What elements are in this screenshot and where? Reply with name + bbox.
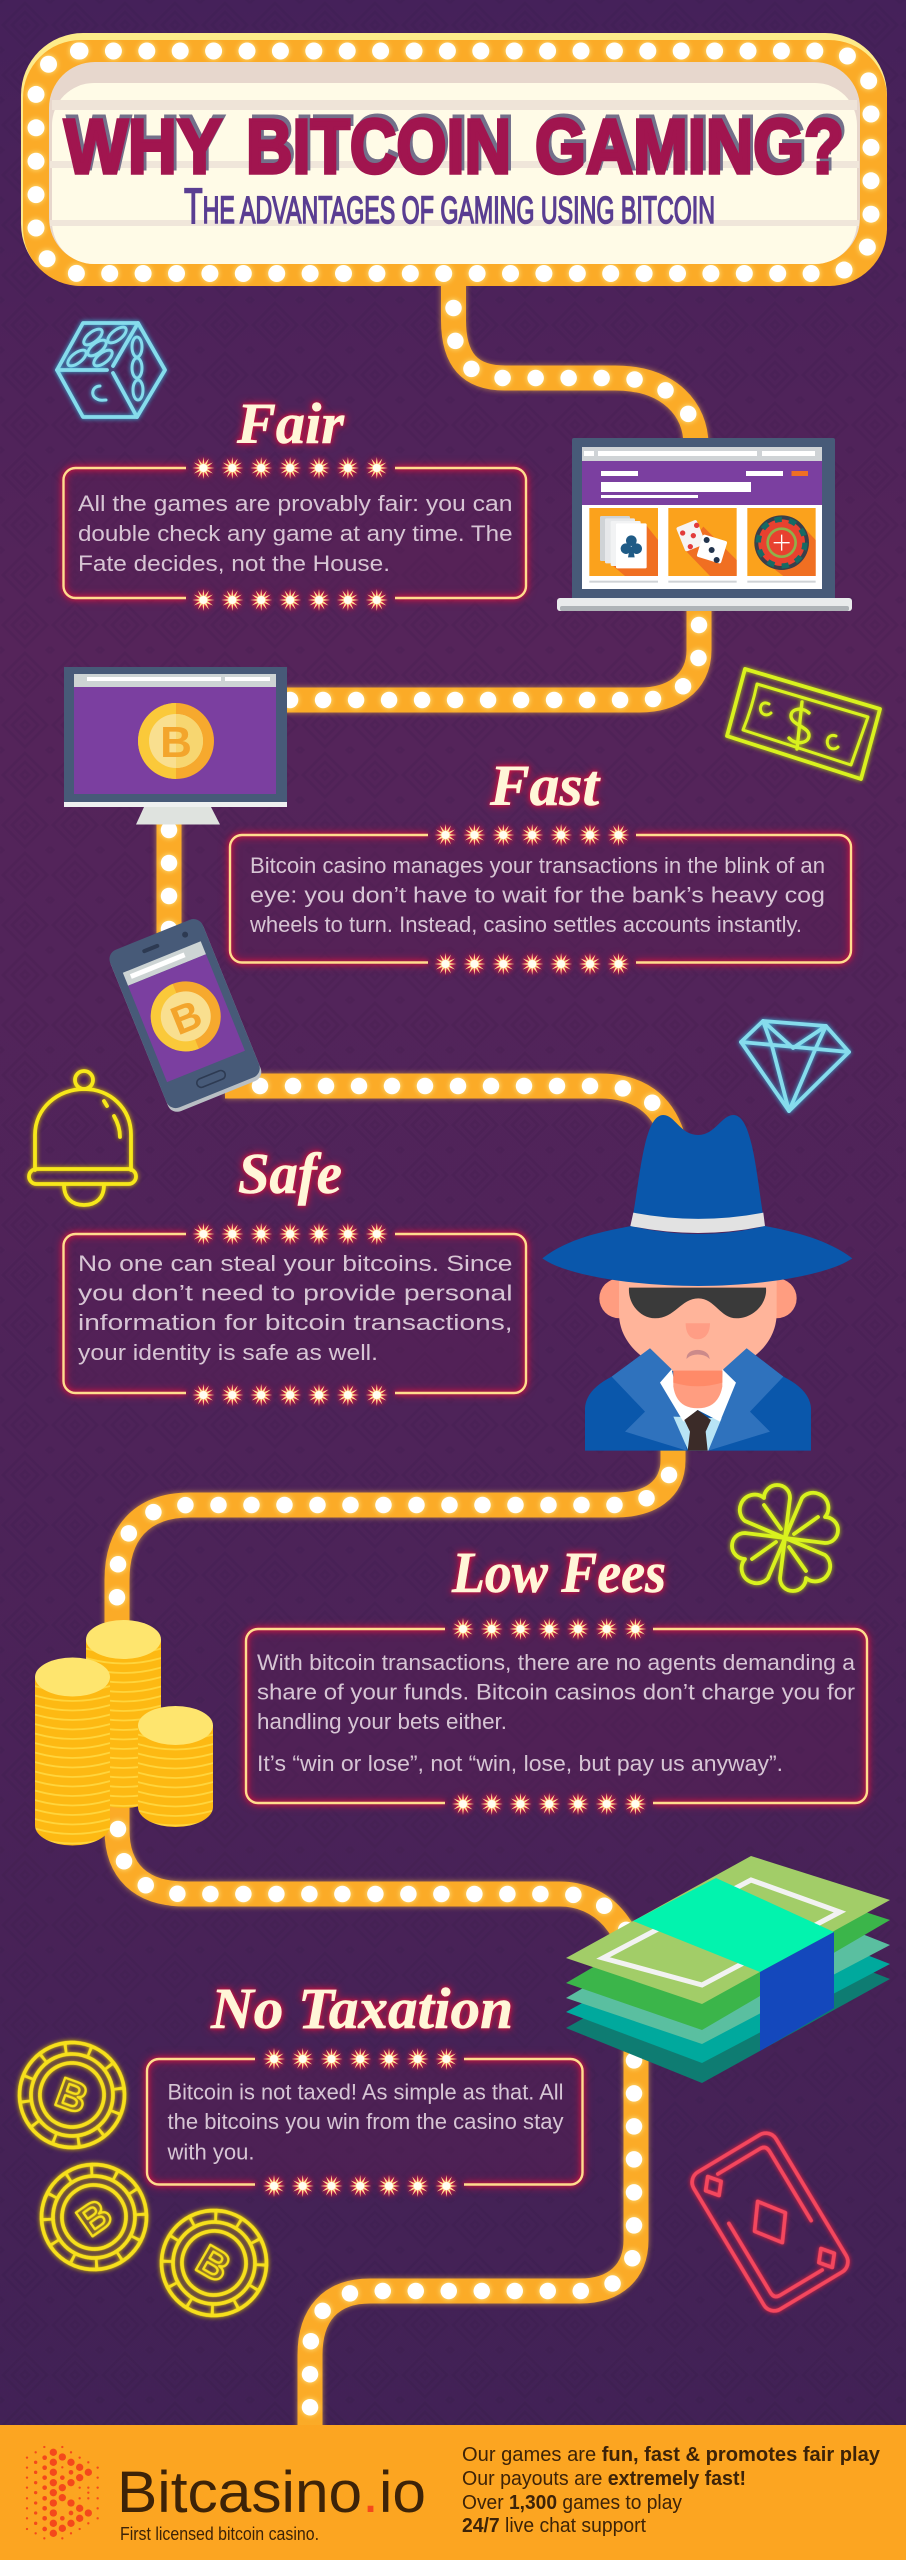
desktop monitor with bitcoin [64, 667, 287, 824]
panel: Fair [64, 391, 526, 611]
text box frame [246, 1629, 867, 1803]
stars bottom [263, 2175, 457, 2197]
icon: neon diamond [741, 1021, 849, 1111]
panel: Fast [230, 753, 851, 975]
stars top [263, 2048, 457, 2070]
panel: No Taxation [147, 1976, 582, 2197]
body text: the bitcoins you win from the casino stay [168, 2109, 564, 2134]
heading: No Taxation: No Taxation [210, 1976, 513, 2041]
marquee light path [117, 280, 699, 2430]
body text [257, 1650, 856, 1776]
body text: Bitcoin is not taxed! As simple as that. All [168, 2080, 564, 2104]
stars bottom [192, 589, 388, 611]
bitcoin coin: B [160, 718, 192, 767]
icon: neon bitcoin chip 2: B [68, 2189, 120, 2245]
panel: Safe [64, 1141, 526, 1406]
text box frame [230, 835, 851, 962]
body text: handling your bets either. [257, 1709, 507, 1734]
stars top [434, 824, 630, 846]
selling points: Over 1,300 games to play [462, 2492, 682, 2514]
icon: neon dollar bill [727, 669, 880, 779]
icon: neon playing card [688, 2129, 852, 2315]
heading: Fast: Fast [489, 753, 601, 818]
laptop with casino site [557, 438, 852, 611]
game thumbnails [589, 508, 816, 583]
body text [78, 491, 512, 576]
bitcoin coin [138, 703, 214, 779]
body text: double check any game at any time. The [78, 521, 512, 546]
title: WHY [67, 100, 225, 186]
icon: neon bitcoin chip 3: B [189, 2235, 239, 2291]
stack of banknotes [566, 1856, 890, 2083]
brand wordmark: Bitcasino.io [117, 2460, 426, 2525]
selling points [462, 2444, 881, 2537]
body text: wheels to turn. Instead, casino settles accounts instantly. [249, 912, 802, 937]
body text: No one can steal your bitcoins. Since [78, 1251, 512, 1276]
selling points: Our games are fun, fast & promotes fair play [462, 2444, 881, 2466]
body text [249, 853, 825, 937]
icon: neon bitcoin chip 3 [142, 2191, 286, 2335]
body text: you don’t need to provide personal [78, 1280, 512, 1306]
body text: with you. [167, 2140, 254, 2164]
spy character [542, 1115, 852, 1451]
title: GAMING? [535, 104, 844, 190]
ears and face [599, 1278, 797, 1374]
title [64, 100, 847, 190]
face details [629, 1288, 766, 1357]
icon: neon bitcoin chip 2 [21, 2144, 167, 2290]
smartphone with bitcoin [106, 916, 264, 1115]
heading: Low Fees: Low Fees [451, 1540, 666, 1605]
text box frame [64, 1234, 526, 1393]
body text: Fate decides, not the House. [78, 551, 390, 576]
stars bottom [192, 1384, 388, 1406]
tie [684, 1410, 711, 1451]
icon: neon bell [29, 1071, 136, 1205]
bitcoin coin: B [165, 992, 208, 1044]
stars top [192, 1223, 388, 1245]
title: GAMING? [538, 100, 847, 186]
heading: Safe: Safe [238, 1141, 342, 1206]
selling points: 24/7 live chat support [462, 2515, 646, 2537]
stars bottom [452, 1793, 646, 1815]
body text: information for bitcoin transactions, [78, 1310, 512, 1335]
title: BITCOIN [246, 104, 511, 190]
body text [167, 2080, 564, 2164]
fedora hat [542, 1115, 852, 1286]
suit [585, 1348, 811, 1451]
gold coin stacks [35, 1620, 213, 1846]
icon: neon dice [57, 323, 165, 417]
selling points: Our payouts are extremely fast! [462, 2468, 746, 2490]
icon: neon clover [732, 1485, 838, 1591]
back stack [86, 1620, 161, 1808]
body text: your identity is safe as well. [78, 1340, 378, 1365]
bitcoin coin [140, 971, 231, 1062]
right stack [138, 1706, 213, 1827]
tagline: First licensed bitcoin casino. [120, 2524, 319, 2544]
body text: It’s “win or lose”, not “win, lose, but pay us anyway”. [257, 1751, 783, 1776]
title: WHY [64, 104, 222, 190]
brand logo mark [26, 2446, 99, 2539]
body text: All the games are provably fair: you can [78, 491, 512, 516]
icon: neon bitcoin chip 1: B [50, 2068, 94, 2123]
title marquee panel [21, 33, 887, 286]
footer band [0, 2425, 906, 2560]
heading: Fair: Fair [236, 391, 344, 456]
text box frame [64, 468, 526, 598]
lapels [612, 1348, 783, 1451]
body text: Bitcoin casino manages your transactions in the blink of an [250, 853, 825, 878]
panel: Low Fees [246, 1540, 867, 1815]
title: BITCOIN [249, 100, 514, 186]
stars bottom [434, 953, 630, 975]
text box frame [147, 2059, 582, 2184]
body text [78, 1251, 512, 1365]
shirt [673, 1417, 722, 1451]
body text: share of your funds. Bitcoin casinos don’t charge you for [257, 1680, 856, 1704]
icon: neon bitcoin chip 1 [5, 2028, 139, 2162]
body text: With bitcoin transactions, there are no agents demanding a [257, 1650, 855, 1675]
body text: eye: you don’t have to wait for the bank’s heavy cog [250, 882, 825, 908]
stars top [192, 457, 388, 479]
stars top [452, 1618, 646, 1640]
left stack [35, 1658, 110, 1846]
